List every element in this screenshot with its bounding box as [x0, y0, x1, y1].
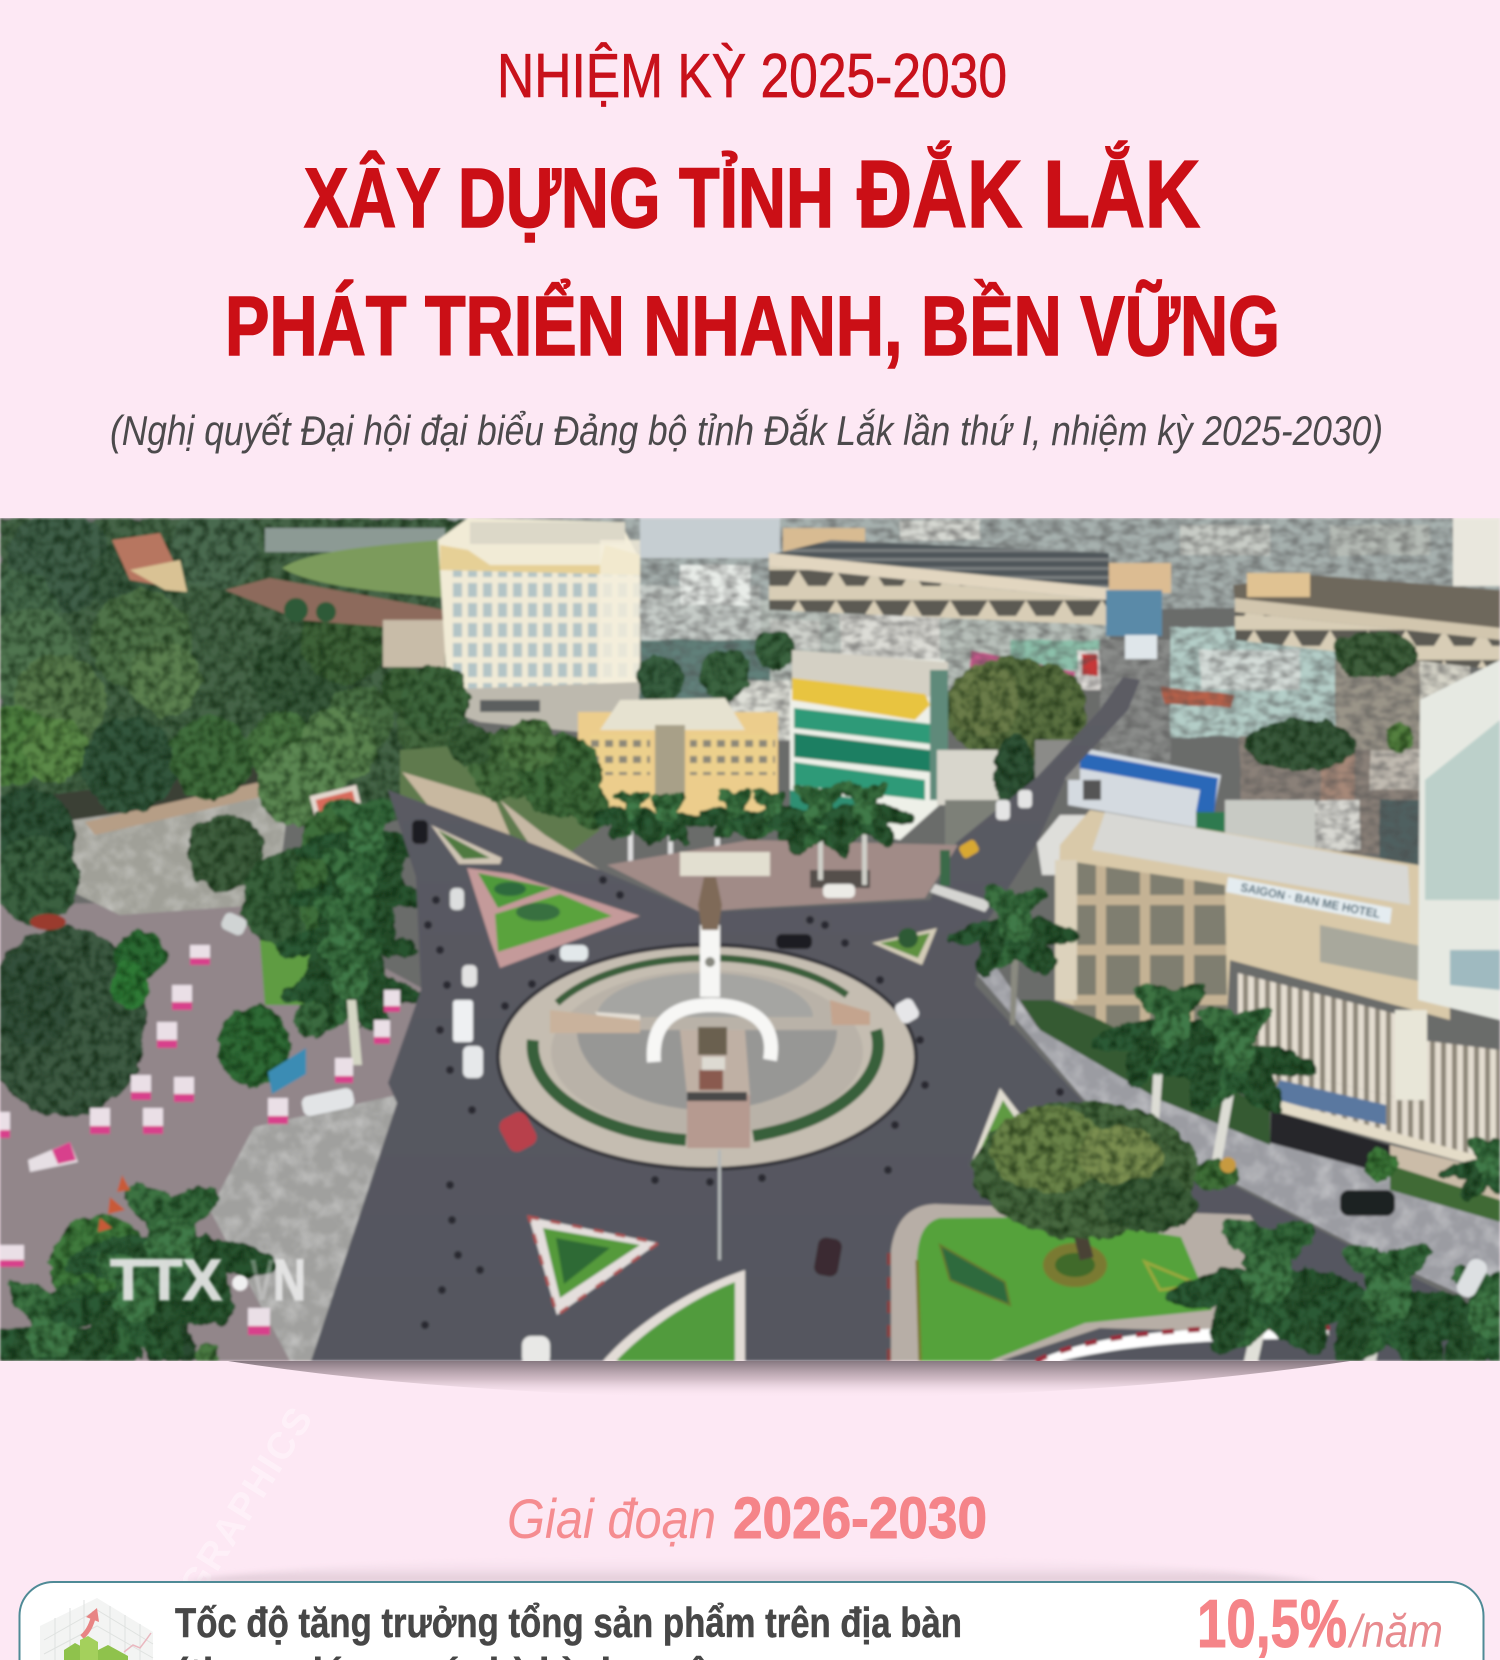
- photo agency mark: TTX: [110, 1248, 222, 1313]
- football field and stand: [265, 528, 445, 598]
- triangle islands: [431, 825, 1040, 1361]
- left tree mass: [0, 500, 470, 818]
- hotel building: SAIGON · BAN ME HOTEL: [1239, 880, 1381, 921]
- card top shadow: [182, 1556, 1320, 1582]
- front palms: [1162, 1209, 1500, 1385]
- far city: [420, 518, 1500, 870]
- central tree and palm strip: [218, 785, 439, 1085]
- main title: XÂY DỰNG TỈNH: [304, 151, 834, 245]
- bottom-left palms: [0, 1174, 281, 1413]
- metric value: 10,5%: [1197, 1586, 1347, 1660]
- photo agency mark: N: [273, 1248, 306, 1313]
- big flowering tree: [973, 1102, 1197, 1261]
- photo agency mark: [110, 1248, 306, 1313]
- main road: [311, 677, 1500, 1361]
- main title: ĐẮK LẮK: [857, 140, 1200, 248]
- photo shadow: [228, 1361, 1350, 1398]
- vehicles: [219, 790, 1490, 1366]
- photo agency mark: V: [250, 1248, 274, 1313]
- header: term label: NHIỆM KỲ 2025-2030: [497, 42, 1007, 111]
- tower building: [430, 518, 780, 733]
- lower-right lawn: [889, 1204, 1330, 1361]
- icon: growth chart with green cubes: [40, 1598, 153, 1660]
- hotel sidewalk: [978, 965, 1500, 1312]
- main title: [225, 140, 1280, 373]
- mid-city buildings: [750, 600, 1470, 870]
- striped hotel wing: [1238, 973, 1500, 1200]
- period heading: Giai đoạn: [507, 1487, 716, 1550]
- roadside kiosks: [0, 945, 400, 1335]
- green and white building: [790, 650, 948, 840]
- roundabout: [496, 877, 918, 1171]
- aerial photo of the roundabout: [0, 500, 1500, 1413]
- metric unit: /năm: [1347, 1605, 1443, 1657]
- shops between green building and street: [937, 733, 1080, 850]
- right long building: [1233, 518, 1500, 670]
- long market building: [769, 528, 1171, 659]
- period heading: 2026-2030: [733, 1486, 987, 1551]
- parked red car: [30, 914, 66, 930]
- hotel building: [1055, 660, 1500, 1050]
- period heading: [507, 1486, 987, 1551]
- buildings right of tower: [640, 565, 790, 740]
- pavement of plaza and lake: [0, 768, 425, 1361]
- yellow building: [578, 698, 778, 817]
- faint watermark on background: GRAPHICS: [172, 1399, 322, 1605]
- hotel garden and palms: [946, 880, 1500, 1222]
- left dark trees: [0, 705, 376, 1117]
- street trees mid-city: [944, 631, 1417, 771]
- verge and trees beside yellow building: [400, 666, 612, 870]
- building row palms: [592, 786, 812, 888]
- panel: GRDP growth card: [20, 1582, 1484, 1660]
- blue building: [1037, 745, 1315, 875]
- metric label: Tốc độ tăng trưởng tổng sản phẩm trên địa bàn: [175, 1599, 962, 1646]
- plaza in front of buildings: [607, 777, 992, 912]
- trees by the tower: [636, 630, 795, 704]
- red roof houses: [112, 533, 445, 667]
